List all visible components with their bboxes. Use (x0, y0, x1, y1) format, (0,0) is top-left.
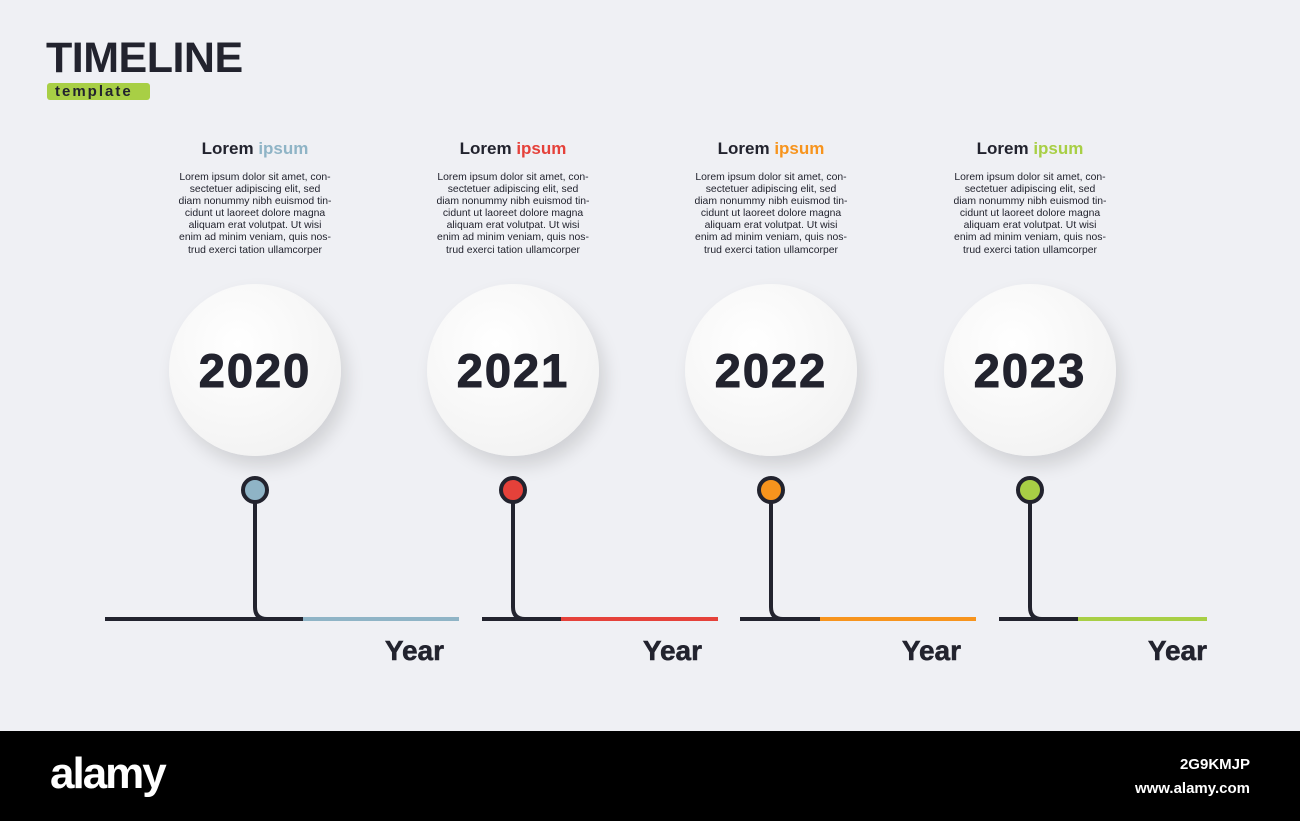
column 3 text: cidunt ut laoreet dolore magna (701, 208, 841, 219)
column 4 text: enim ad minim veniam, quis nos- (954, 232, 1106, 243)
year label 2: Year (643, 635, 702, 666)
footer id (1135, 756, 1250, 797)
year label 1: Year (385, 635, 444, 666)
column 4 text: aliquam erat volutpat. Ut wisi (964, 220, 1096, 231)
column 4 circle: 2023 (974, 344, 1086, 396)
column 2 text: enim ad minim veniam, quis nos- (437, 232, 589, 243)
column 4 text: sectetuer adipiscing elit, sed (965, 184, 1095, 195)
column 3 circle (685, 284, 857, 456)
column 3 text: aliquam erat volutpat. Ut wisi (705, 220, 837, 231)
column 3 circle: 2022 (715, 344, 827, 396)
column 2 text: diam nonummy nibh euismod tin- (436, 196, 590, 207)
column 3 heading: Lorem ipsum (718, 139, 824, 158)
column 4 text: trud exerci tation ullamcorper (963, 245, 1097, 256)
title: TIMELINE (46, 34, 243, 82)
column 1 text: cidunt ut laoreet dolore magna (185, 208, 325, 219)
column 2 circle (427, 284, 599, 456)
column 2 text: sectetuer adipiscing elit, sed (448, 184, 578, 195)
column 3 text: diam nonummy nibh euismod tin- (694, 196, 848, 207)
column 1 circle: 2020 (199, 344, 311, 396)
footer id: 2G9KMJP (1180, 756, 1250, 773)
column 4 circle (944, 284, 1116, 456)
column 2 circle: 2021 (457, 344, 569, 396)
column 1 heading: Lorem ipsum (202, 139, 308, 158)
column 2 text: Lorem ipsum dolor sit amet, con- (437, 172, 589, 183)
column 1 text: trud exerci tation ullamcorper (188, 245, 322, 256)
subtitle badge: template (55, 83, 133, 100)
column 4 heading: Lorem ipsum (977, 139, 1083, 158)
pin 4 (999, 478, 1207, 619)
year label 4: Year (1148, 635, 1207, 666)
column 1 text: diam nonummy nibh euismod tin- (178, 196, 332, 207)
column 1 text: enim ad minim veniam, quis nos- (179, 232, 331, 243)
column 2 heading: Lorem ipsum (460, 139, 566, 158)
pin 2 (482, 478, 718, 619)
column 3 text (694, 172, 848, 256)
column 4 text: cidunt ut laoreet dolore magna (960, 208, 1100, 219)
column 1 circle (169, 284, 341, 456)
year label 3: Year (902, 635, 961, 666)
column 4 text: diam nonummy nibh euismod tin- (953, 196, 1107, 207)
column 1 text: aliquam erat volutpat. Ut wisi (189, 220, 321, 231)
column 1 text: Lorem ipsum dolor sit amet, con- (179, 172, 331, 183)
column 3 text: Lorem ipsum dolor sit amet, con- (695, 172, 847, 183)
column 4 text: Lorem ipsum dolor sit amet, con- (954, 172, 1106, 183)
footer logo: alamy (50, 749, 165, 798)
column 2 text: cidunt ut laoreet dolore magna (443, 208, 583, 219)
column 1 text: sectetuer adipiscing elit, sed (190, 184, 320, 195)
column 2 text (436, 172, 590, 256)
column 3 text: trud exerci tation ullamcorper (704, 245, 838, 256)
column 3 text: sectetuer adipiscing elit, sed (706, 184, 836, 195)
footer id: www.alamy.com (1135, 780, 1250, 797)
column 3 text: enim ad minim veniam, quis nos- (695, 232, 847, 243)
column 2 text: aliquam erat volutpat. Ut wisi (447, 220, 579, 231)
pin 3 (740, 478, 976, 619)
column 4 text (953, 172, 1107, 256)
pin 1 (105, 478, 459, 619)
column 2 text: trud exerci tation ullamcorper (446, 245, 580, 256)
column 1 text (178, 172, 332, 256)
footer bar (0, 731, 1300, 821)
